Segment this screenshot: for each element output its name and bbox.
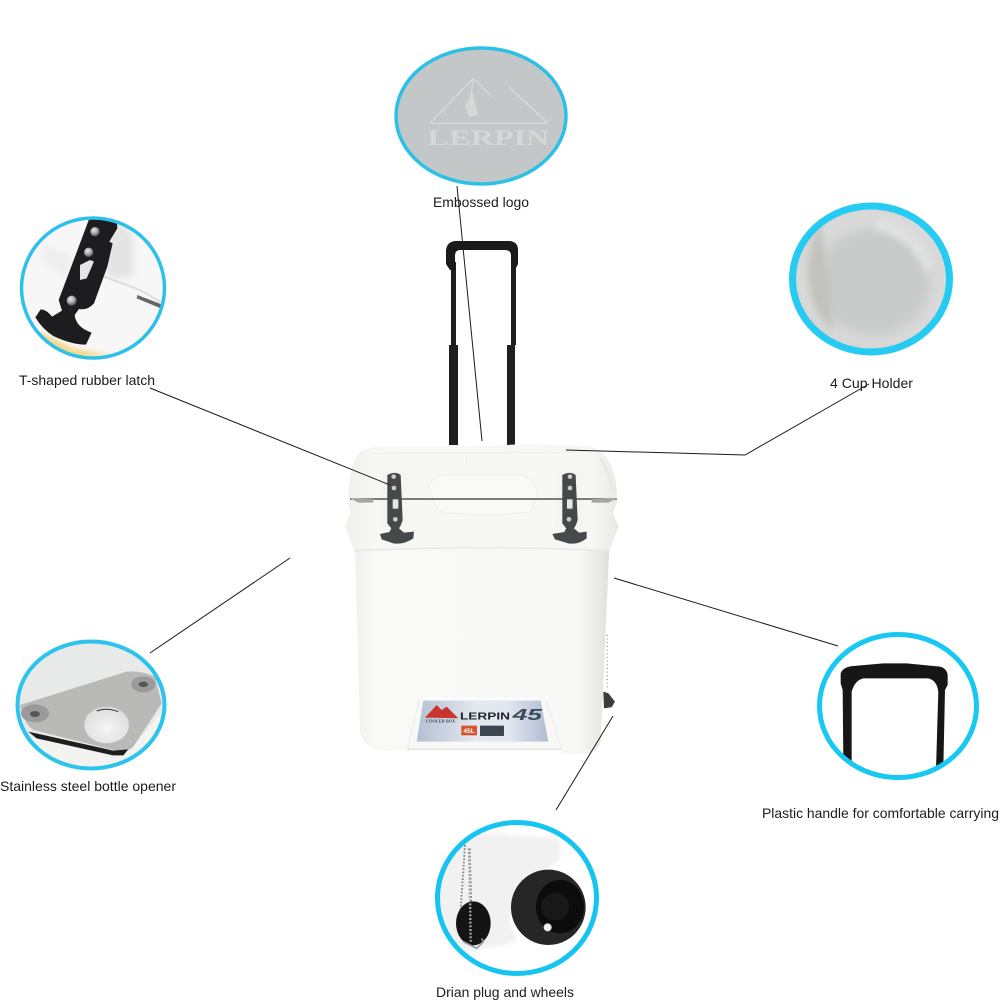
label: plastic handle: Plastic handle for comfortable carrying xyxy=(762,805,999,821)
product label xyxy=(417,701,548,742)
lid carry grip xyxy=(428,475,537,515)
lid rim shadows xyxy=(354,548,609,551)
callout: embossed logo: LERPIN xyxy=(428,125,549,150)
label: cup holder: 4 Cup Holder xyxy=(830,375,913,391)
leader lines xyxy=(150,186,869,810)
callout: cup holder xyxy=(792,205,950,353)
label mountain logo xyxy=(425,705,458,718)
cooler lid xyxy=(345,444,619,551)
cooler box xyxy=(345,444,619,754)
product label: LERPIN xyxy=(460,711,510,722)
label: T-shaped latch: T-shaped rubber latch xyxy=(19,372,155,388)
callout: bottle opener xyxy=(16,640,166,770)
callout: plastic handle xyxy=(820,634,976,778)
drain chain and plug xyxy=(603,635,615,708)
product label: 45L xyxy=(463,728,475,735)
callout: T-shaped latch xyxy=(20,216,166,360)
left latch xyxy=(380,473,414,544)
callout: drain plug and wheels xyxy=(435,820,599,976)
right latch xyxy=(552,473,587,544)
label: embossed logo: Embossed logo xyxy=(433,194,529,210)
label: bottle opener: Stainless steel bottle opener xyxy=(0,778,176,794)
cooler body xyxy=(355,548,609,754)
product label: COOLER BOX xyxy=(426,719,455,724)
latch recesses xyxy=(380,472,582,527)
callout: embossed logo xyxy=(396,48,566,184)
telescopic trolley handle xyxy=(446,241,518,445)
bottom recess xyxy=(407,699,562,749)
label: drain plug: Drian plug and wheels xyxy=(436,984,574,1000)
lid seam xyxy=(350,498,617,503)
product label: 45 xyxy=(511,707,543,724)
